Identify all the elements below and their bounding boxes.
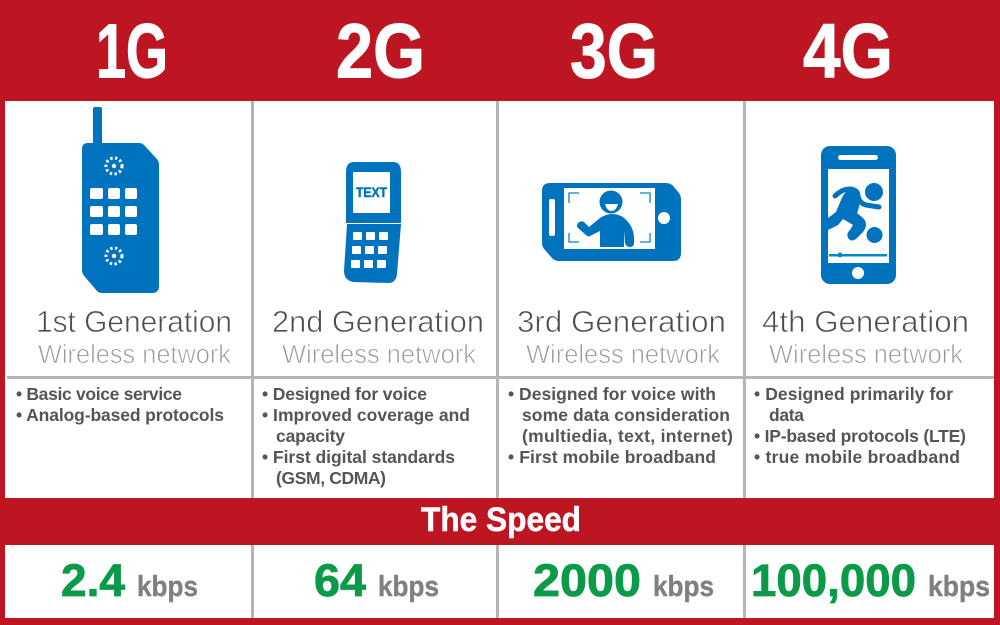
text block: 4G features: • IP-based protocols (LTE) <box>754 426 966 446</box>
text block: 1G features: • Basic voice service <box>16 384 182 404</box>
text block: 1G features: • Analog-based protocols <box>16 405 224 425</box>
panel: 3rd generation <box>508 183 733 467</box>
subheading: Wireless network <box>526 341 720 369</box>
text block: 3G features: • First mobile broadband <box>508 447 716 467</box>
text block: 2G features: • Designed for voice <box>262 384 427 404</box>
speed: 1G <box>61 555 198 606</box>
text block: 3G features <box>508 384 733 467</box>
heading: 3rd generation: 3rd Generation <box>517 304 726 339</box>
text block: 3G features: some data consideration <box>522 405 730 425</box>
speed: 2G: kbps <box>378 571 439 603</box>
heading: the speed: The Speed <box>421 501 581 539</box>
text block: 4G features: • true mobile broadband <box>754 447 960 467</box>
subheading: Wireless network <box>769 341 963 369</box>
text block: 4G features <box>754 384 966 467</box>
panel: 4th generation <box>754 146 969 467</box>
speed: 4G: 100,000 <box>751 555 916 606</box>
panel: 2nd generation <box>262 162 484 488</box>
icon: antenna phone <box>82 107 159 293</box>
speed: 3G: 2000 <box>533 555 641 606</box>
title: generation headers: 4G <box>803 8 893 94</box>
title: generation headers: 2G <box>336 8 425 94</box>
text block: 1G features <box>16 384 224 425</box>
text block: 2G features: • Improved coverage and <box>262 405 470 425</box>
icon: flip phone <box>344 162 401 283</box>
speed: 4G: kbps <box>928 571 990 603</box>
heading: 4th generation: 4th Generation <box>762 304 969 339</box>
speed: 4G <box>751 555 990 606</box>
title: generation headers: 3G <box>570 8 658 94</box>
text block: 4G features: data <box>769 405 804 425</box>
text block: 2G features: • First digital standards <box>262 447 455 467</box>
heading: 2nd generation: 2nd Generation <box>272 304 484 339</box>
icon: landscape smartphone with video call <box>542 183 681 261</box>
text block: 4G features: • Designed primarily for <box>754 384 953 404</box>
title: generation headers <box>96 8 893 94</box>
panel: 1st generation <box>16 107 232 425</box>
speed: 2G: 64 <box>314 555 366 606</box>
speed: 1G: 2.4 <box>61 555 125 606</box>
text block: 3G features: (multiedia, text, internet) <box>522 426 733 446</box>
speed: 3G: kbps <box>653 571 714 603</box>
text block: 2G features: capacity <box>276 426 345 446</box>
speed: 3G <box>533 555 714 606</box>
speed: 1G: kbps <box>137 571 198 603</box>
icon: smartphone with sports video <box>821 146 896 284</box>
speed: 2G <box>314 555 439 606</box>
icon: flip phone: TEXT <box>356 184 387 200</box>
subheading: Wireless network <box>38 341 231 369</box>
title: generation headers: 1G <box>96 8 168 94</box>
text block: 2G features: (GSM, CDMA) <box>276 468 386 488</box>
subheading: Wireless network <box>282 341 476 369</box>
text block: 3G features: • Designed for voice with <box>508 384 716 404</box>
heading: 1st generation: 1st Generation <box>36 304 232 339</box>
text block: 2G features <box>262 384 470 488</box>
